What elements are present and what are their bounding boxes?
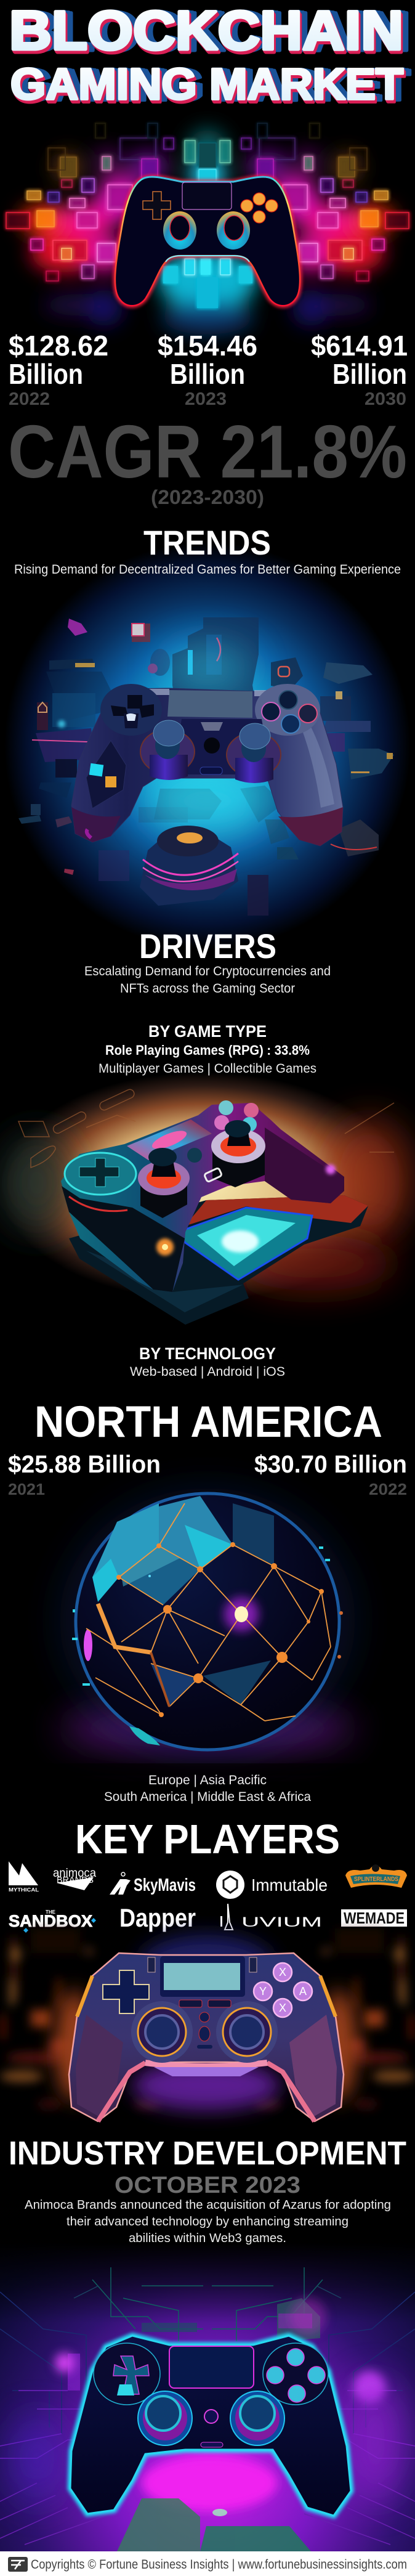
- heading: drivers: DRIVERS: [139, 927, 276, 965]
- logo: Mythical: MYTHICAL: [9, 1887, 39, 1893]
- d-pad: [103, 1970, 149, 2013]
- floating city blocks: [18, 617, 394, 916]
- d-pad: [113, 2356, 149, 2394]
- illustration: neon controller: [6, 123, 409, 335]
- title line: GAMING MARKET: GAMING MARKET: [10, 60, 403, 109]
- stat: 2023: [158, 330, 257, 409]
- illustration: cyan-magenta controller on circuit board: [0, 2243, 415, 2551]
- logo: Wemade: WEMADE: [344, 1909, 405, 1927]
- title: [9, 0, 403, 109]
- region heading: north america: $30.70 Billion: [254, 1451, 407, 1478]
- stat: 2022: 2022: [9, 389, 50, 409]
- orange mesh: [86, 1503, 331, 1721]
- face buttons: [241, 193, 278, 223]
- face buttons: [267, 2349, 325, 2402]
- segment: by game type: Multiplayer Games | Collectible Games: [99, 1062, 316, 1076]
- segment: by technology: BY TECHNOLOGY: [139, 1344, 276, 1363]
- development text: OCTOBER 2023: [115, 2172, 300, 2198]
- logo: Immutable: Immutable: [251, 1875, 328, 1895]
- controller: A: [299, 1985, 307, 1997]
- sphere: [76, 1493, 339, 1750]
- logo: Animoca Brands: BRANDS: [57, 1875, 94, 1885]
- region heading: north america: $25.88 Billion: [8, 1451, 161, 1478]
- title line: BLOCKCHAIN: BLOCKCHAIN: [9, 0, 403, 61]
- controller: X: [279, 1966, 286, 1978]
- development text: Animoca Brands announced the acquisition of Azarus for adopting: [25, 2198, 391, 2212]
- segment: by game type: BY GAME TYPE: [148, 1022, 267, 1041]
- segment: by technology: Web-based | Android | iOS: [130, 1365, 285, 1379]
- controller: [70, 2336, 351, 2516]
- logos: key players: [9, 1861, 407, 1933]
- faint circuit outlines: [18, 1088, 394, 1168]
- bokeh background mirrored: [224, 1928, 415, 2108]
- controller: [71, 684, 343, 846]
- purple floor glow: [60, 1707, 355, 1749]
- green device: [117, 2498, 311, 2551]
- stat: 2023: $154.46: [158, 330, 257, 362]
- middle buttons: [179, 2000, 231, 2049]
- neon squares left: [6, 123, 195, 281]
- purple node glow: [224, 1597, 259, 1631]
- logo: Illuvium: UVIUM: [241, 1914, 322, 1930]
- d-pad: [143, 192, 171, 219]
- circuit lines left: [0, 2267, 203, 2545]
- thumb sticks: [163, 211, 250, 250]
- development text: abilities within Web3 games.: [129, 2232, 286, 2245]
- region heading: north america: 2022: [369, 1480, 407, 1498]
- side glows: [12, 2378, 406, 2501]
- cover below globe: [0, 1763, 415, 1776]
- region heading: north america: 2021: [8, 1480, 45, 1498]
- logo: Splinterlands: [345, 1864, 407, 1888]
- segment: by game type: Role Playing Games (RPG) : 33.8%: [105, 1042, 310, 1058]
- glowing nodes: [116, 1542, 324, 1717]
- logo: Mythical: [9, 1861, 39, 1893]
- footer: [0, 2551, 415, 2576]
- illustration: purple controller with bokeh: [0, 1928, 415, 2121]
- CAGR: (2023-2030): [151, 486, 264, 508]
- controller: [69, 1953, 344, 2121]
- other regions: South America | Middle East & Africa: [104, 1790, 311, 1804]
- cyan glow: [4, 542, 411, 949]
- heading: drivers: NFTs across the Gaming Sector: [120, 981, 295, 996]
- neon squares right: [220, 123, 409, 281]
- controller: Y: [259, 1985, 267, 1997]
- heading: trends: TRENDS: [143, 523, 271, 562]
- development text: their advanced technology by enhancing streaming: [66, 2215, 349, 2229]
- other regions: Europe | Asia Pacific: [148, 1773, 267, 1787]
- stat: 2030: [311, 330, 408, 409]
- heading: trends: [14, 523, 401, 577]
- stat: 2022: $128.62: [9, 330, 108, 362]
- cyan facets: [84, 1496, 274, 1745]
- segment: by game type: [99, 1022, 316, 1076]
- glowing pedestal: [140, 826, 238, 906]
- stat: 2022: [9, 330, 108, 409]
- game controller: [115, 177, 300, 306]
- sparks: [55, 2298, 385, 2511]
- stat: 2030: $614.91: [311, 330, 408, 362]
- illustration: blockchain globe: [60, 1488, 355, 1753]
- magenta glow: [0, 2243, 415, 2551]
- logo: Sky Mavis: [110, 1872, 196, 1895]
- logo: Sky Mavis: SkyMavis: [134, 1875, 196, 1895]
- sticks: [131, 2001, 278, 2063]
- cyan light overlay: [146, 644, 269, 835]
- illustration: tilted controller with screen: [0, 1072, 413, 1325]
- warm glow: [0, 1072, 413, 1300]
- logo: Immutable: [216, 1871, 328, 1899]
- logo: Animoca Brands: [53, 1867, 96, 1890]
- circuit lines right: [212, 2267, 415, 2545]
- controller: X: [279, 2002, 286, 2014]
- region heading: north america: [8, 1398, 407, 1498]
- circuit chip: [68, 2298, 320, 2391]
- heading: key players: KEY PLAYERS: [75, 1816, 340, 1863]
- icon: Fortune Business Insights logo: [8, 2557, 28, 2572]
- screen: [160, 1956, 245, 1997]
- logo: The Sandbox: SANDBOX: [9, 1912, 92, 1930]
- neon glow field: [20, 129, 395, 335]
- logo: Illuvium: [220, 1904, 322, 1930]
- device body: [69, 1195, 368, 1325]
- development text: [25, 2172, 391, 2245]
- segment: by technology: [130, 1344, 285, 1379]
- controller halo: [55, 1935, 357, 2110]
- illustration: blue controller over floating city: [4, 542, 411, 949]
- center cyan blocks: [163, 143, 252, 308]
- controller: [61, 1100, 344, 1292]
- sticks: [138, 2391, 284, 2445]
- logo: Animoca Brands: animoca: [53, 1867, 96, 1880]
- heading: drivers: [84, 927, 331, 996]
- bright node: [235, 1606, 248, 1622]
- face buttons: [254, 1963, 312, 2017]
- logo: The Sandbox: THE: [46, 1909, 56, 1915]
- bokeh background: [0, 1928, 191, 2108]
- heading: drivers: Escalating Demand for Cryptocurrencies and: [84, 964, 331, 978]
- stat: 2023: 2023: [185, 389, 227, 409]
- orbit sparks: [72, 1546, 330, 1686]
- logo: Dapper: Dapper: [119, 1903, 196, 1932]
- other regions: [104, 1773, 311, 1804]
- stat: 2022: Billion: [9, 358, 83, 390]
- heading: trends: Rising Demand for Decentralized Games for Better Gaming Experience: [14, 563, 401, 577]
- stat: 2023: Billion: [170, 358, 245, 390]
- stat: 2030: 2030: [365, 389, 406, 409]
- logo: Splinterlands: SPLINTERLANDS: [354, 1876, 398, 1883]
- region heading: north america: NORTH AMERICA: [34, 1398, 382, 1447]
